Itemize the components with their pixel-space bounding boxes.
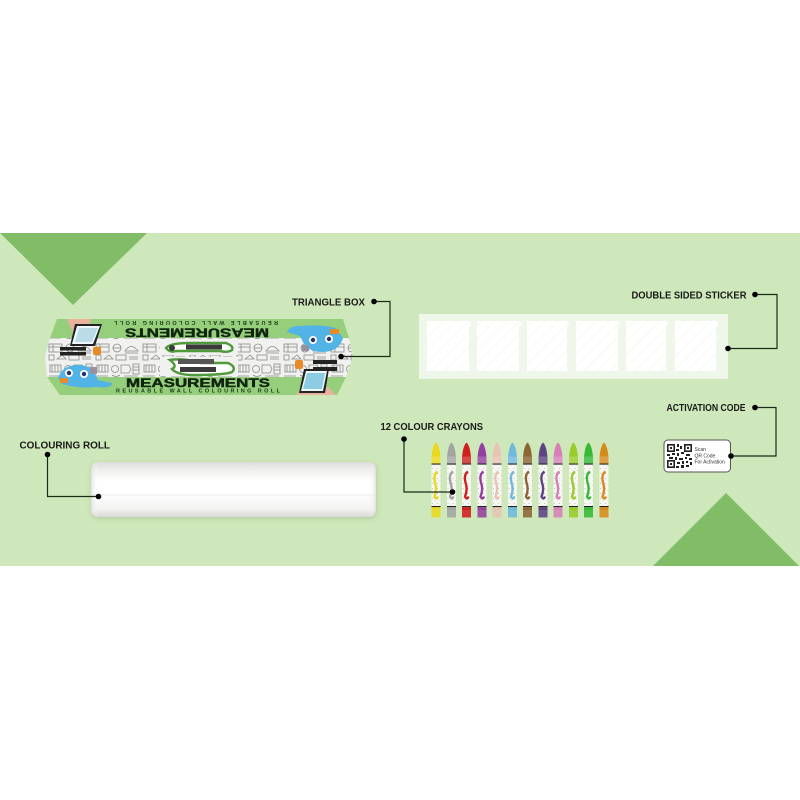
colouring roll — [91, 462, 376, 518]
leader dots — [725, 292, 758, 351]
leader line — [728, 294, 777, 348]
12 colour crayons — [432, 442, 608, 518]
leader line — [404, 439, 452, 492]
tablet icon bottom right — [296, 369, 336, 395]
flipped box heading: REUSABLE WALL COLOURING ROLL — [113, 319, 278, 325]
black bars and orange tag right — [295, 360, 337, 371]
label text: 12 COLOUR CRAYONS — [380, 421, 483, 433]
box white doodle faces — [45, 338, 353, 377]
QR code — [667, 444, 692, 468]
mascot top right — [287, 325, 343, 352]
triangle box product — [45, 319, 353, 395]
label: triangle box — [292, 296, 390, 359]
label: activation code — [666, 402, 776, 459]
flipped box heading — [113, 319, 278, 338]
box heading: MEASUREMENTS — [126, 378, 270, 390]
tablet icon top left — [67, 319, 102, 346]
label: 12 colour crayons — [380, 421, 483, 495]
decorative triangle: top left — [0, 233, 147, 305]
activation card — [664, 440, 730, 472]
leader line — [341, 302, 390, 356]
leader line — [731, 408, 776, 456]
card text: For Activation — [694, 460, 725, 466]
logo bottom — [160, 357, 238, 376]
box bottom green face — [47, 377, 346, 395]
leader dots — [45, 452, 101, 499]
label text: TRIANGLE BOX — [292, 296, 365, 308]
mascot bottom left — [58, 365, 112, 388]
background band — [0, 233, 800, 566]
card text: Scan — [694, 447, 706, 453]
double sided sticker sheet — [419, 314, 728, 379]
black bars and orange tag left — [60, 347, 101, 356]
leader dots — [728, 405, 758, 459]
leader dots — [338, 299, 377, 359]
decorative triangle: bottom right — [653, 493, 799, 566]
box subheading: REUSABLE WALL COLOURING ROLL — [116, 388, 281, 394]
sticker squares — [427, 321, 718, 371]
leader dots — [401, 436, 455, 495]
label: double sided sticker — [632, 290, 777, 351]
label: colouring roll — [20, 440, 111, 499]
logo top — [160, 340, 238, 355]
card text: QR Code — [694, 454, 716, 460]
label text: ACTIVATION CODE — [666, 402, 746, 414]
flipped box heading: MEASUREMENTS — [125, 326, 269, 338]
label text: DOUBLE SIDED STICKER — [632, 290, 747, 302]
leader line — [48, 454, 98, 496]
label text: COLOURING ROLL — [20, 440, 111, 452]
box top green face — [50, 319, 349, 338]
